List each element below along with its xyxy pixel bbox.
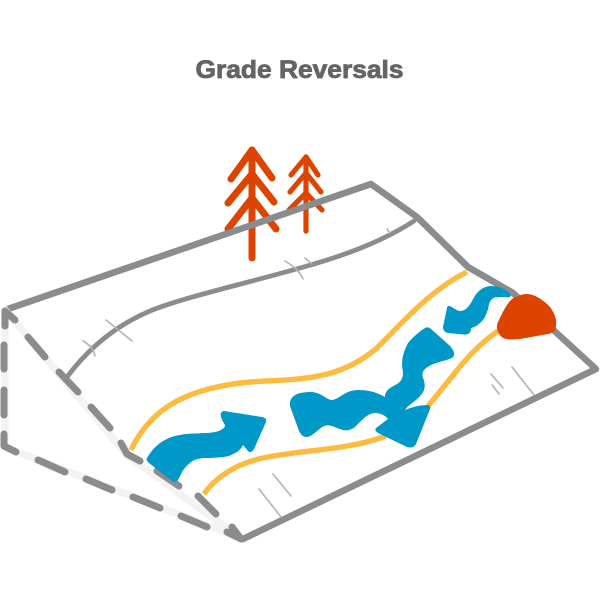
water arrow: lower left <box>147 411 266 482</box>
water arrow: centre pooling <box>290 327 454 448</box>
rock <box>497 294 556 340</box>
icon: small tree <box>289 157 322 231</box>
cross-section pale band <box>5 310 240 538</box>
water arrow: upper right <box>443 286 511 335</box>
road upper edge <box>131 272 467 450</box>
title: Grade Reversals <box>196 56 404 84</box>
cross-section dashed outline <box>4 311 241 539</box>
icon: large tree <box>228 150 276 258</box>
contour tick marks <box>83 229 534 517</box>
road cut contour line <box>67 221 414 377</box>
slope outline <box>5 184 596 539</box>
road lower edge <box>204 331 498 494</box>
